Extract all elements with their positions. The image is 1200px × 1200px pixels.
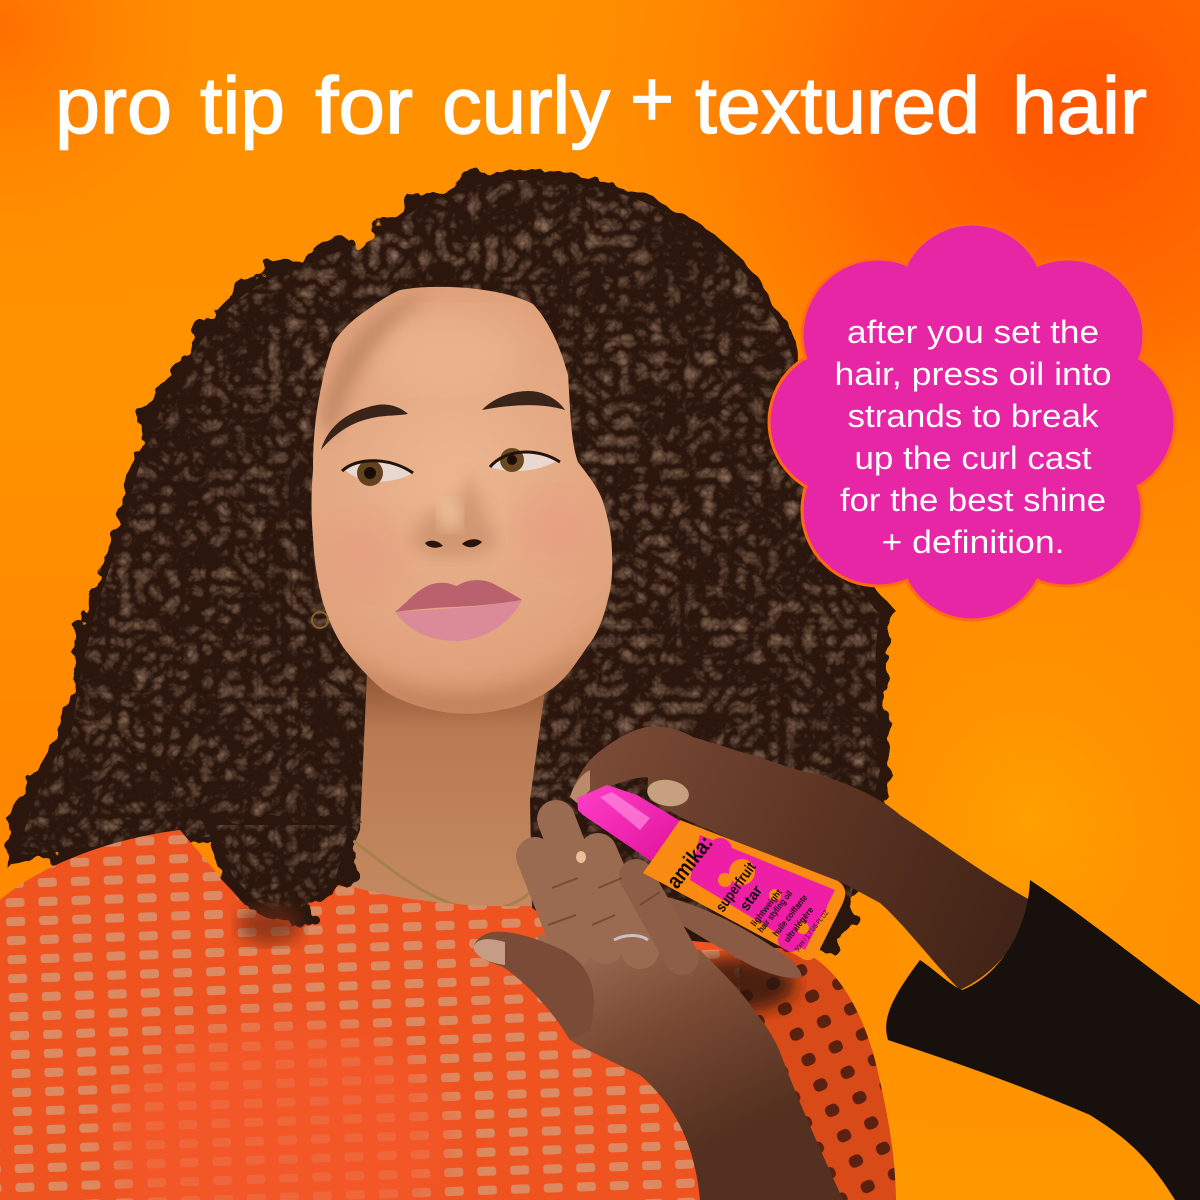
index finger nail: [570, 770, 590, 803]
cheek blush right: [515, 490, 595, 570]
thumb nail: [645, 777, 691, 809]
callout text: up the curl cast: [854, 440, 1092, 476]
title: hair: [1012, 61, 1147, 150]
forehead highlight: [365, 310, 525, 390]
title: tip: [200, 61, 285, 150]
photo: left eyebrow: [321, 405, 408, 450]
title: curly: [442, 61, 610, 150]
hair shadow beneath bottle: [675, 957, 795, 1013]
product: amika bottle: [577, 785, 860, 970]
callout text: for the best shine: [840, 482, 1106, 518]
photo: curly hair: [5, 170, 895, 950]
photo: neck and chest: [335, 650, 545, 915]
cheek blush left: [323, 513, 407, 597]
finger creases: [548, 878, 660, 925]
bottle description: 50ml / 1.7 US FL OZ: [794, 909, 831, 953]
callout text: after you set the: [847, 314, 1099, 350]
callout text: strands to break: [848, 398, 1100, 434]
title: +: [630, 54, 674, 143]
photo: black jacket sleeve: [886, 880, 1200, 1200]
photo: stylist lower hand: [473, 819, 843, 1200]
bottle description: ultralégère: [782, 905, 815, 944]
thumb nail: [473, 939, 505, 965]
bottle name: superfruit: [712, 859, 760, 915]
title: textured: [695, 61, 980, 150]
photo: stylist fingers behind bottle: [667, 897, 802, 978]
callout text: + definition.: [882, 524, 1064, 560]
photo: stylist upper hand and arm: [570, 727, 1030, 990]
photo: face: [312, 287, 612, 714]
bottle description: hair styling oil: [756, 889, 794, 934]
jaw shadow: [345, 650, 585, 714]
ring: [614, 936, 648, 940]
pump highlight: [600, 792, 650, 830]
bottle body: [643, 820, 846, 960]
photo: right eyebrow: [482, 391, 565, 410]
sweater inner layer glow: [110, 1020, 450, 1200]
photo: left eye: [342, 460, 413, 486]
callout text: [834, 314, 1112, 560]
photo: lips: [395, 580, 522, 641]
callout text: hair, press oil into: [834, 356, 1112, 392]
bottle description: lightweight: [749, 887, 784, 928]
photo: nose: [412, 470, 497, 558]
photo: sweater: [0, 820, 900, 1200]
hairline shadow: [320, 292, 433, 440]
thumb: [473, 932, 594, 1040]
bottle brand: amika:: [661, 830, 718, 893]
title: [55, 54, 1147, 150]
bottle description: [749, 887, 831, 953]
photo: right eye: [490, 448, 560, 472]
sweater dark mesh right side: [740, 930, 900, 1200]
title: pro: [55, 61, 172, 150]
title: for: [315, 61, 413, 150]
photo: hair over shoulder: [205, 820, 360, 945]
bottle name second line: star: [736, 882, 766, 914]
oil drop: [576, 851, 586, 863]
callout: pink flower: [769, 224, 1175, 620]
photo: necklace: [352, 840, 530, 910]
bottle pump: [577, 785, 682, 865]
earring: [312, 612, 328, 628]
bottle description: huile coiffante: [771, 893, 809, 938]
